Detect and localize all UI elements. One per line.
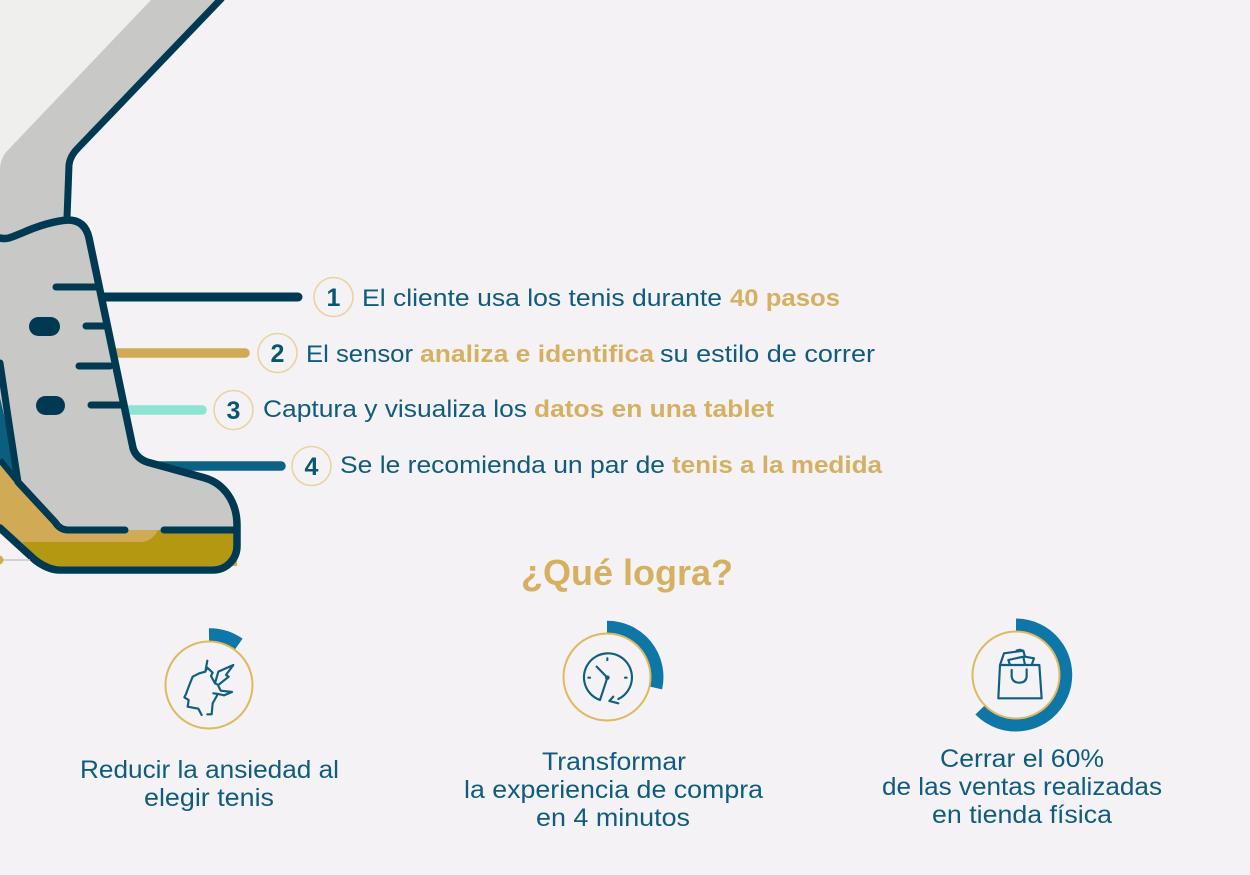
- sole light gold: [0, 462, 237, 566]
- eyelet upper: [29, 317, 60, 336]
- leader line 3: [118, 405, 202, 415]
- ring: [972, 632, 1060, 718]
- benefit: reducir ansiedad: [80, 635, 339, 812]
- badge 2: 2: [271, 340, 284, 368]
- sock light area: [0, 0, 151, 170]
- progress arc 28%: [607, 627, 657, 688]
- step 4 text: [340, 452, 883, 479]
- ring: [564, 634, 650, 720]
- shoe upper fill: [0, 220, 237, 535]
- step 4 text: tenis a la medida: [672, 452, 883, 479]
- step 3 text: [263, 396, 774, 423]
- shoe outline: [0, 220, 237, 570]
- label: Reducir la ansiedad al: [80, 756, 339, 784]
- step 4 text: Se le recomienda un par de: [340, 452, 665, 479]
- step 3: [214, 390, 774, 430]
- heel seam: [0, 363, 125, 530]
- step 3 text: datos en una tablet: [534, 396, 774, 423]
- baseline thin line: [0, 559, 30, 561]
- eyelet lower: [36, 396, 65, 415]
- laces: [56, 287, 122, 405]
- step 2 text: El sensor: [306, 341, 413, 368]
- progress arc 60%: [980, 625, 1066, 725]
- icon: shopping bag: [998, 650, 1042, 698]
- label: en 4 minutos: [536, 804, 690, 832]
- icon: clock: [584, 653, 632, 703]
- icon: head with lightning: [184, 661, 233, 715]
- toe seam: [164, 526, 237, 534]
- label: de las ventas realizadas: [882, 773, 1162, 801]
- step 2 text: [306, 341, 875, 368]
- step 1: [314, 278, 840, 316]
- gold dot: [0, 556, 4, 564]
- benefit: cerrar ventas: [882, 625, 1162, 829]
- badge 4: 4: [305, 453, 319, 481]
- leg: [0, 0, 222, 245]
- label: elegir tenis: [144, 784, 274, 812]
- benefit: transformar experiencia: [464, 627, 763, 832]
- heading: ¿Qué logra?: [521, 552, 733, 593]
- label: Transformar: [542, 748, 686, 776]
- badge 4: [292, 446, 331, 486]
- step 2: [258, 334, 875, 372]
- step 4: [292, 446, 883, 486]
- step 1 text: [362, 285, 840, 312]
- badge 1: 1: [327, 284, 341, 312]
- label: [464, 748, 763, 832]
- label: [882, 745, 1162, 829]
- label: [80, 756, 339, 812]
- sole dark gold: [22, 530, 237, 566]
- heel teal panel: [0, 398, 18, 482]
- progress arc 10%: [209, 635, 239, 644]
- badge 1: [314, 278, 353, 316]
- step 2 text: su estilo de correr: [660, 341, 875, 368]
- illustration: leg and shoe with sensor leader lines: [0, 0, 298, 570]
- badge 2: [258, 334, 297, 372]
- leg outline: [67, 0, 222, 218]
- leader line 4: [150, 461, 281, 471]
- step 3 text: Captura y visualiza los: [263, 396, 527, 423]
- leader line 2: [112, 348, 245, 358]
- badge 3: 3: [227, 397, 240, 425]
- step 1 text: 40 pasos: [730, 285, 840, 312]
- label: la experiencia de compra: [464, 776, 763, 804]
- label: Cerrar el 60%: [940, 745, 1104, 773]
- leader line 1: [100, 292, 298, 302]
- heel seam lower: [0, 460, 18, 482]
- badge 3: [214, 390, 253, 430]
- label: en tienda física: [932, 801, 1112, 829]
- step 2 text: analiza e identifica: [420, 341, 655, 368]
- step 1 text: El cliente usa los tenis durante: [362, 285, 722, 312]
- ring: [166, 642, 252, 728]
